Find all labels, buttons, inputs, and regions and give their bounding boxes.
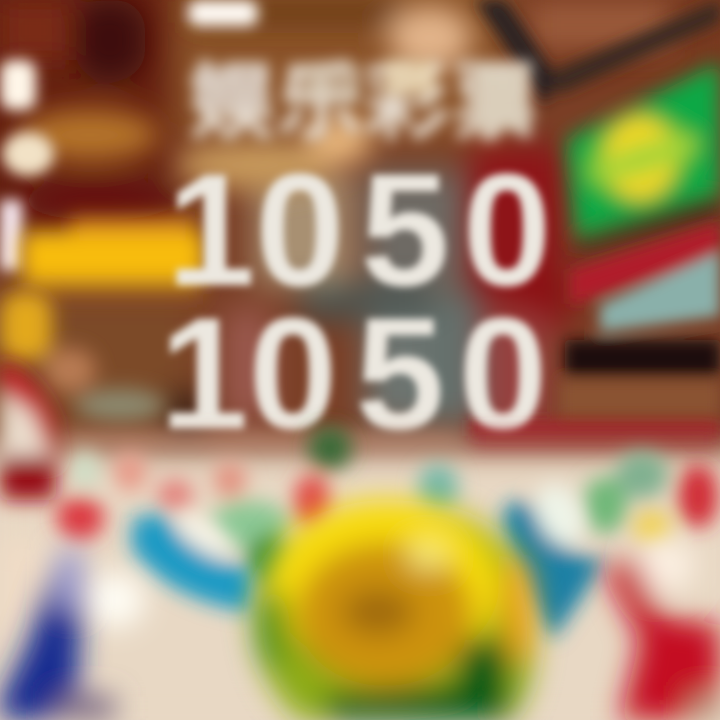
ball yellow rim xyxy=(271,500,499,670)
ball logo disc xyxy=(297,542,473,686)
yellow counter band xyxy=(20,218,204,298)
red and white ball on left edge xyxy=(0,362,56,500)
white and red ball right xyxy=(605,539,720,720)
large yellow and green ball xyxy=(252,500,537,720)
ceiling lights xyxy=(0,0,258,270)
number 1050 lower xyxy=(160,284,547,463)
number 1050 lower: 0 xyxy=(459,284,547,463)
blue ball far left xyxy=(0,550,115,720)
ceiling details xyxy=(0,0,670,220)
number 1050 lower: 1 xyxy=(160,284,248,463)
ball highlight xyxy=(408,541,448,569)
blue candy left xyxy=(132,505,255,612)
green sign xyxy=(566,62,720,252)
number 1050 lower: 5 xyxy=(356,284,444,463)
ball lower green xyxy=(325,640,508,720)
ball logo script xyxy=(342,588,414,636)
number 1050 upper: 1 xyxy=(167,140,255,319)
heading: 娱乐彩票 xyxy=(188,55,538,151)
ball orange right edge xyxy=(502,555,534,665)
white area left with highlight xyxy=(0,540,145,640)
ball left green xyxy=(254,590,290,670)
ball green rim xyxy=(252,500,537,720)
dark beam top right xyxy=(475,0,720,105)
left shop details xyxy=(0,292,165,421)
table edge xyxy=(60,434,720,446)
number 1050 upper: 0 xyxy=(256,140,344,319)
number 1050 upper xyxy=(167,140,551,319)
number 1050 lower: 0 xyxy=(249,284,337,463)
number 1050 upper: 5 xyxy=(361,140,449,319)
confetti pieces xyxy=(56,426,718,586)
number 1050 upper: 0 xyxy=(463,140,551,319)
right shop shelves xyxy=(470,222,720,436)
blue candy right xyxy=(502,477,605,640)
